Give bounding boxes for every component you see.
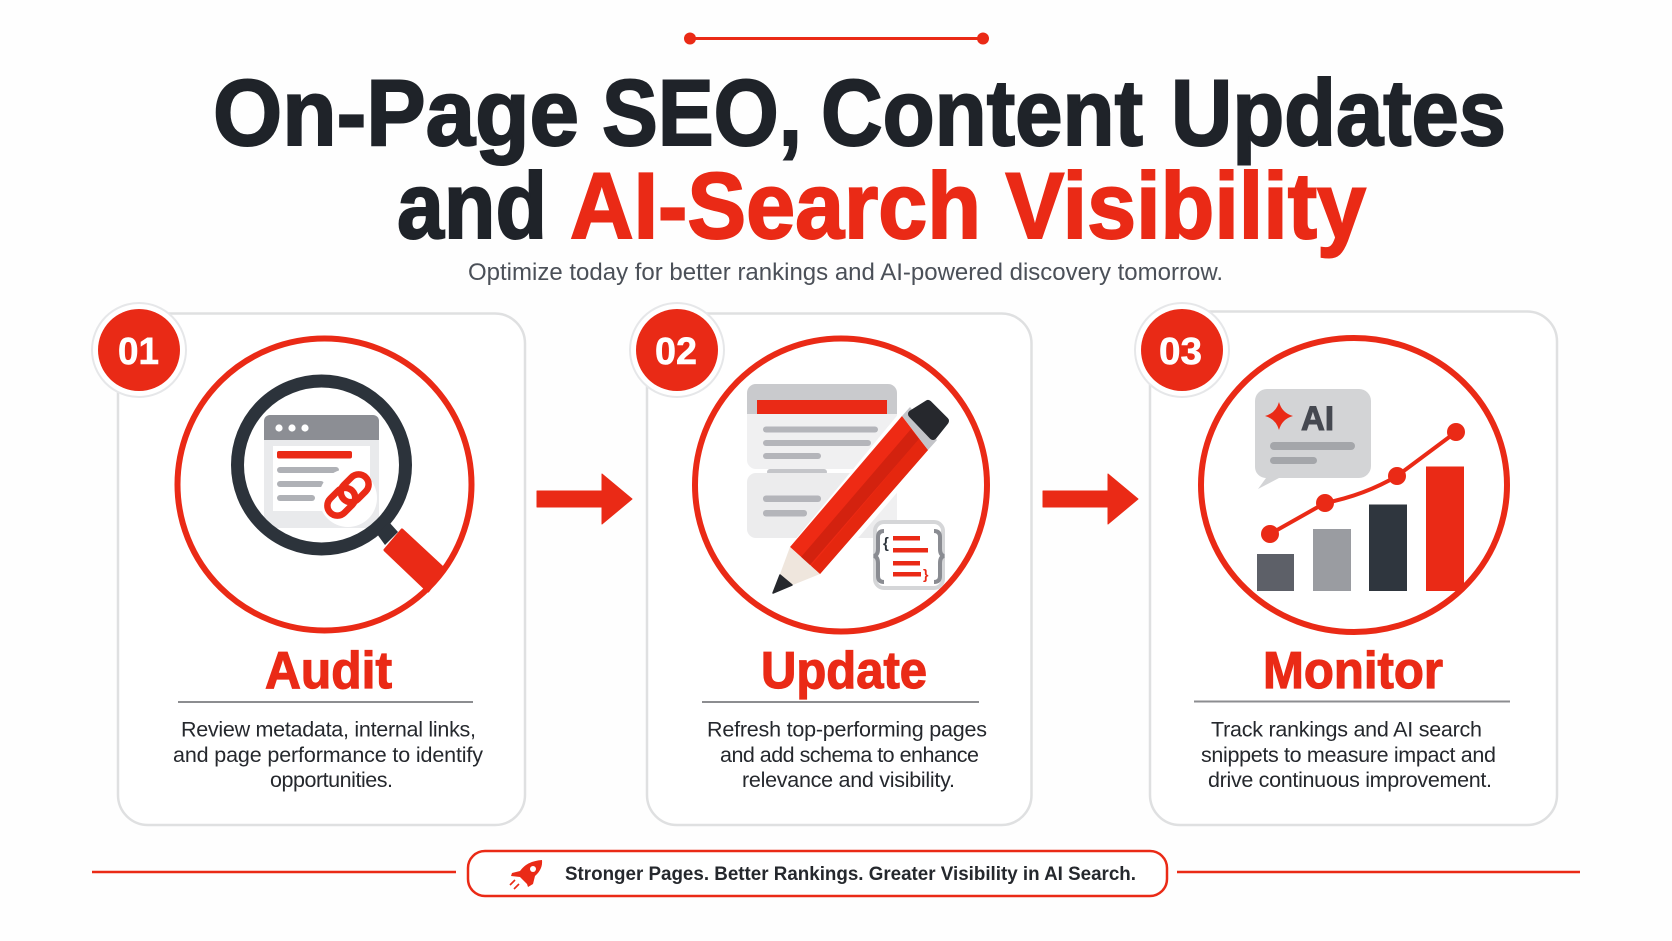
step badge 01: 01 (118, 331, 159, 373)
step badge 02: 02 (655, 331, 697, 373)
icon: AI snippet and growth chart (1201, 338, 1507, 632)
icon: rocket (510, 860, 542, 889)
icon: AI snippet and growth chart: AI (1301, 400, 1334, 438)
text: monitor description: drive continuous improvement. (1208, 768, 1492, 792)
footer banner (92, 851, 1580, 896)
title: AI-Search Visibility (570, 153, 1366, 258)
step badge 03: 03 (1159, 331, 1202, 373)
title: and (397, 153, 547, 258)
text: update description (707, 718, 987, 792)
text: monitor description: snippets to measure impact and (1201, 743, 1496, 767)
icon: pencil editing documents with schema: { (883, 535, 889, 552)
panel: update (630, 303, 1032, 825)
text: monitor description: Track rankings and AI search (1211, 718, 1482, 742)
card: update (647, 314, 1032, 825)
panel: monitor (1135, 303, 1557, 825)
heading: monitor: Monitor (1263, 642, 1443, 700)
text: update description: and add schema to enhance (720, 743, 979, 767)
icon: magnifying glass over web page (178, 338, 472, 630)
text: update description: relevance and visibility. (742, 768, 955, 792)
title (213, 60, 1506, 258)
arrow: audit to update (537, 474, 632, 524)
text: audit description: Review metadata, internal links, (181, 718, 476, 742)
step badge 01 (92, 303, 186, 397)
step badge 02 (630, 303, 724, 397)
text: monitor description (1201, 718, 1496, 792)
heading: update: Update (761, 642, 927, 700)
card: monitor (1150, 312, 1557, 825)
card: audit (118, 314, 525, 825)
title: Content (821, 60, 1143, 165)
icon: pencil editing documents with schema (695, 338, 987, 632)
heading: audit: Audit (265, 642, 392, 700)
subtitle: Optimize today for better rankings and AI-powered discovery tomorrow. (468, 259, 1223, 286)
icon: pencil editing documents with schema: } (923, 566, 929, 582)
text: update description: Refresh top-performing pages (707, 718, 987, 742)
text: audit description (173, 718, 483, 792)
title: Updates (1171, 60, 1506, 165)
step badge 03 (1135, 303, 1229, 397)
arrow: update to monitor (1043, 474, 1138, 524)
text: audit description: opportunities. (270, 768, 393, 792)
text: footer tagline: Stronger Pages. Better Rankings. Greater Visibility in AI Search. (565, 864, 1136, 885)
top accent line (684, 32, 989, 44)
title: SEO, (602, 60, 802, 165)
panel: audit (92, 303, 525, 825)
title: On-Page (213, 60, 579, 165)
text: audit description: and page performance to identify (173, 743, 483, 767)
